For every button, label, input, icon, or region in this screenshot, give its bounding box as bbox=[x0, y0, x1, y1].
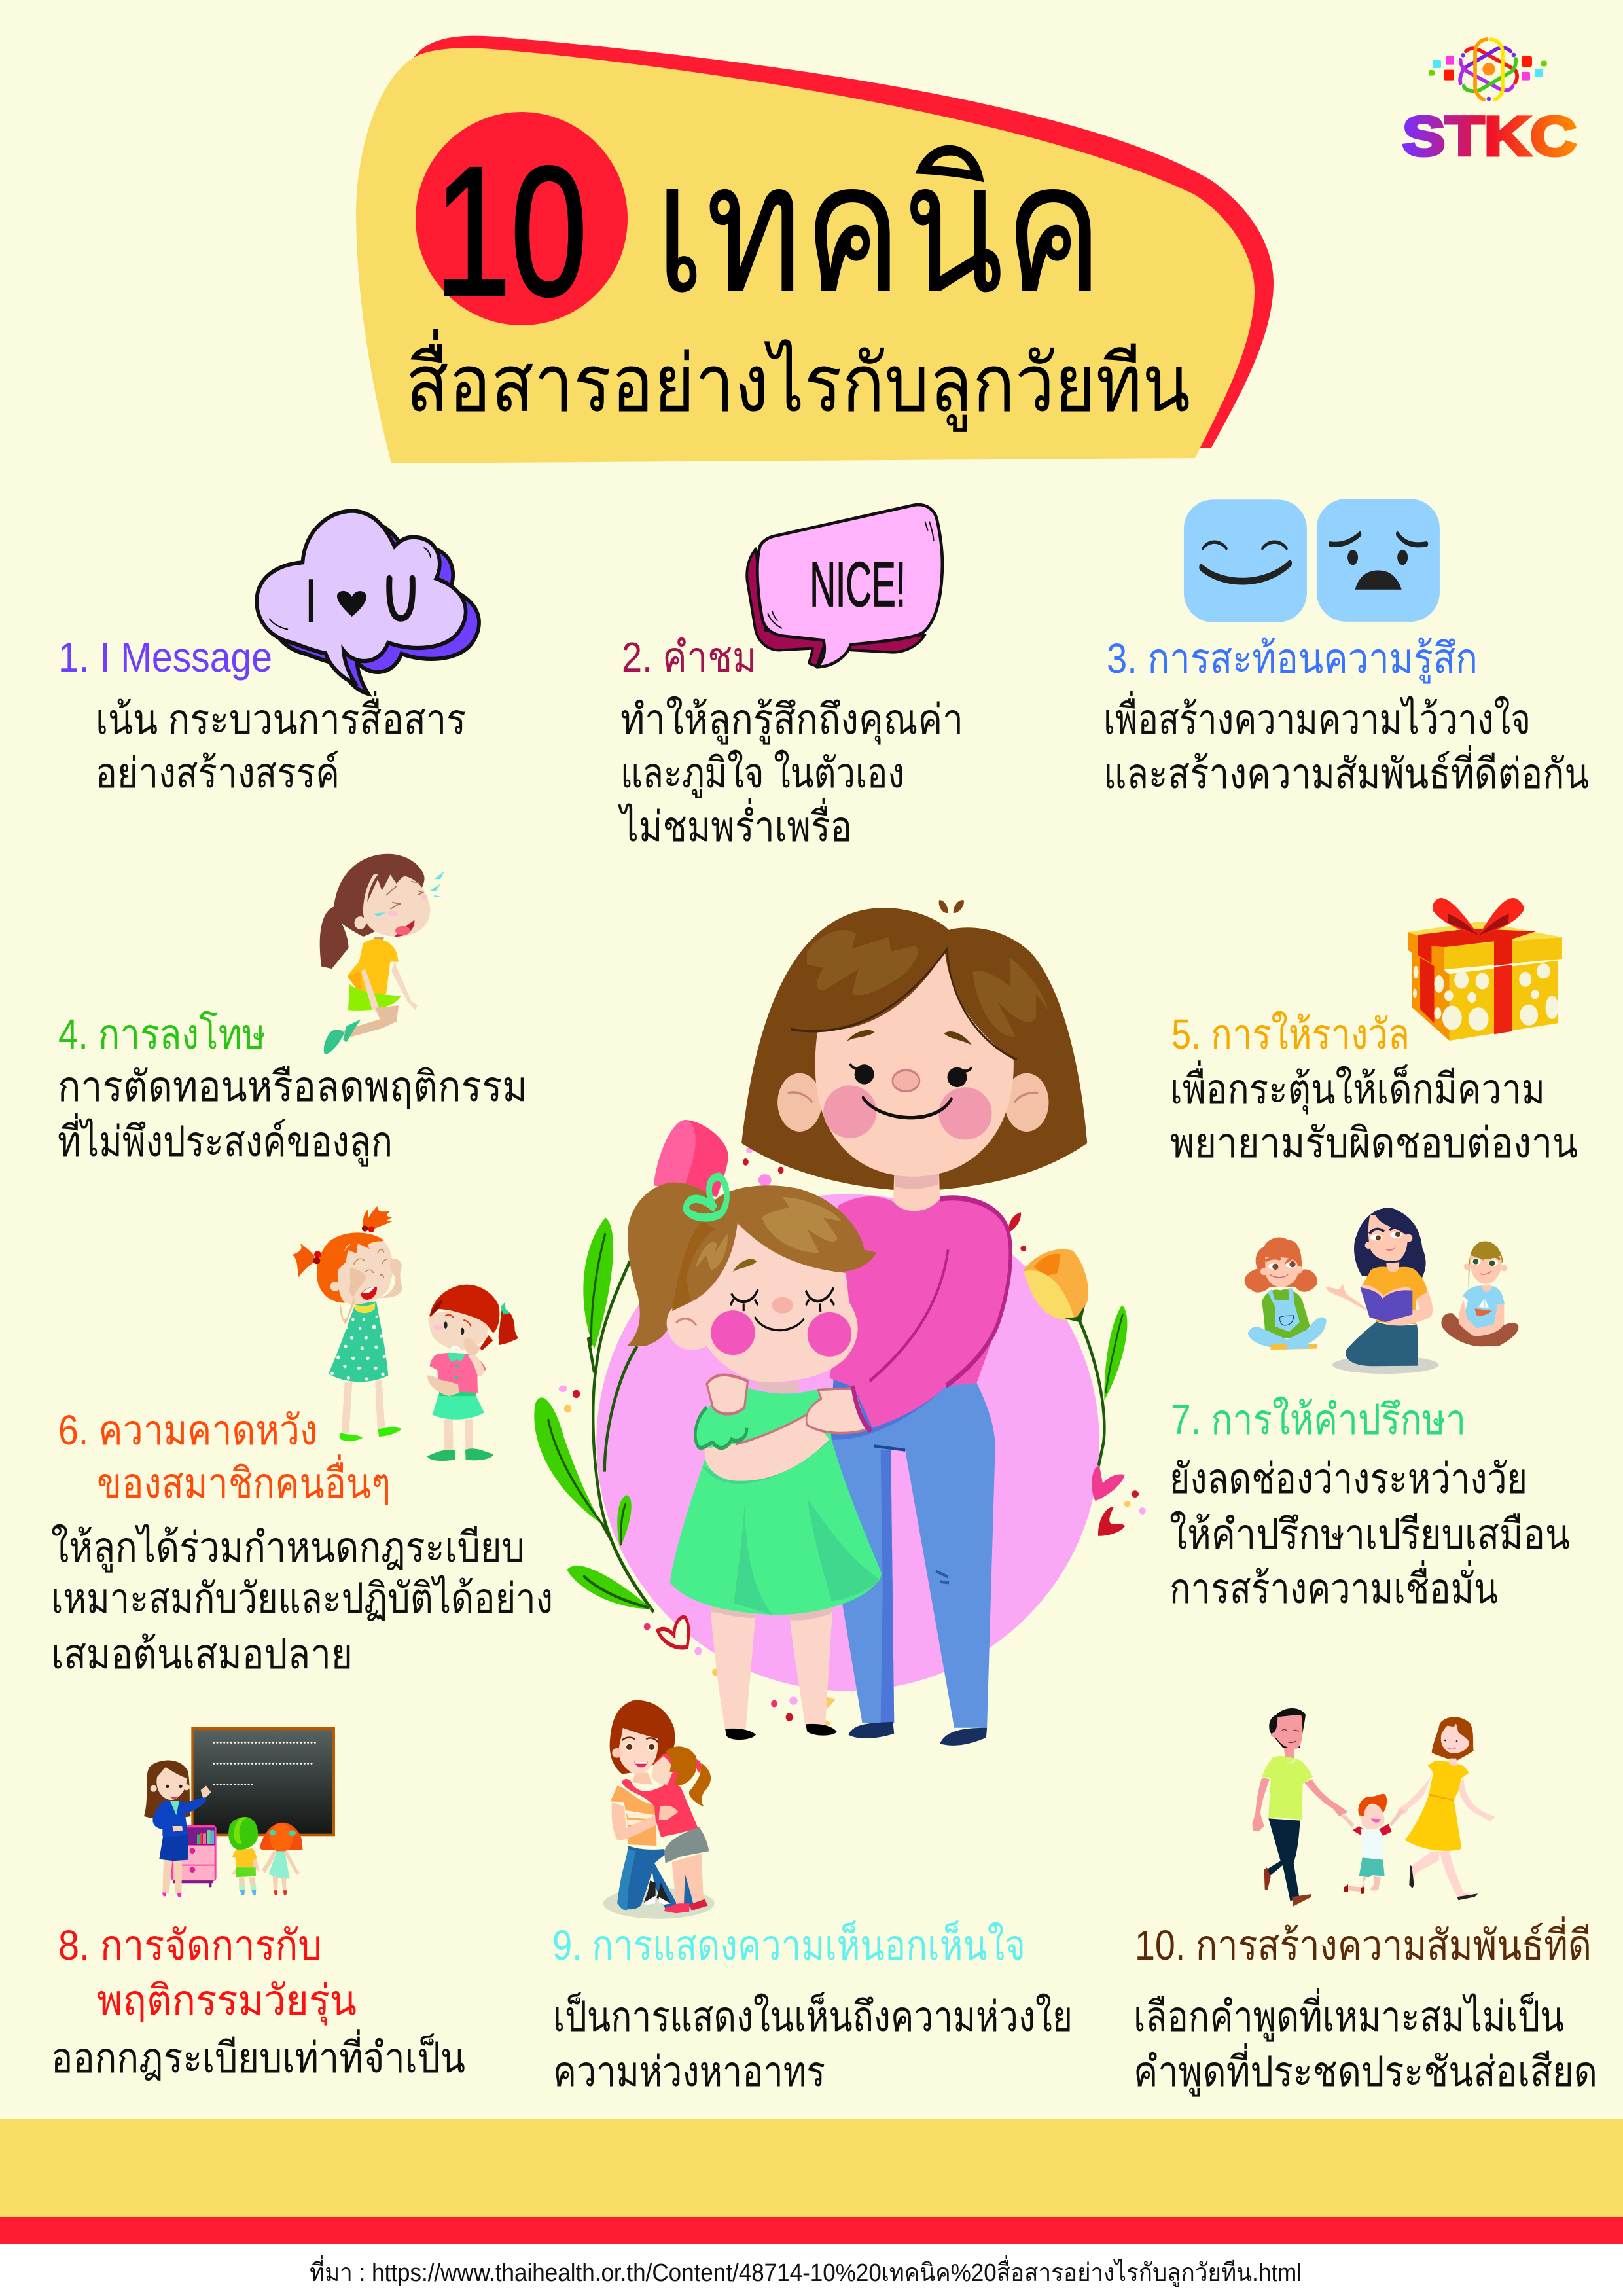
section 3 body: เพื่อสร้างความความไว้วางใจ bbox=[1103, 691, 1531, 743]
decorative leaves and stems left bbox=[534, 1217, 654, 1612]
section 2 body: และภูมิใจ ในตัวเอง bbox=[620, 749, 904, 798]
section 2 icon: NICE speech bubble: NICE! bbox=[810, 550, 906, 620]
daughter: legs and shoes bbox=[710, 1604, 837, 1740]
section 6 heading: ของสมาชิกคนอื่นๆ bbox=[97, 1454, 391, 1507]
decorative hearts and dots bbox=[559, 1147, 1146, 1728]
section 10 icon: walking family bbox=[1252, 1708, 1495, 1907]
section 4 icon: crying girl bbox=[320, 854, 444, 1054]
section 1 body: อย่างสร้างสรรค์ bbox=[96, 749, 340, 797]
mother: jeans and shoes bbox=[830, 1378, 995, 1746]
section 7 body: ให้คำปรึกษาเปรียบเสมือน bbox=[1169, 1511, 1570, 1558]
section 3 icon: emoji faces bbox=[1184, 499, 1440, 622]
section 2 heading: 2. คำชม bbox=[622, 634, 757, 681]
footer white background bbox=[0, 2244, 1623, 2296]
section 9 body bbox=[553, 1992, 1073, 2095]
pink background circle bbox=[596, 1194, 1099, 1691]
section 6 icon: two upset girls bbox=[293, 1206, 518, 1461]
section 1 icon: I love U cloud bbox=[257, 511, 479, 694]
section 4 body bbox=[58, 1063, 527, 1167]
section 9 body: เป็นการแสดงในเห็นถึงความห่วงใย bbox=[553, 1992, 1073, 2040]
section 8 heading: พฤติกรรมวัยรุ่น bbox=[97, 1977, 357, 2026]
mother: ears, face and features bbox=[777, 900, 1048, 1211]
section 10 body bbox=[1133, 1988, 1597, 2097]
section 5 body bbox=[1170, 1060, 1578, 1166]
section 4 heading: 4. การลงโทษ bbox=[58, 1011, 266, 1058]
section 7 body bbox=[1169, 1455, 1570, 1612]
section 6 body: ให้ลูกได้ร่วมกำหนดกฎระเบียบ bbox=[51, 1524, 525, 1573]
section 9 heading: 9. การแสดงความเห็นอกเห็นใจ bbox=[552, 1921, 1026, 1969]
section 7 icon: teacher reading with two children bbox=[1245, 1208, 1518, 1374]
mother: hair back bbox=[741, 908, 1087, 1190]
section 2 body: ไม่ชมพร่ำเพรื่อ bbox=[618, 798, 852, 850]
hugging arms and hands bbox=[695, 1375, 870, 1481]
section 1 icon: I love U cloud: I bbox=[307, 567, 315, 636]
logo: STKC: STKC bbox=[1402, 105, 1577, 167]
section 6 heading: 6. ความคาดหวัง bbox=[58, 1407, 317, 1454]
section 2 body: ทำให้ลูกรู้สึกถึงคุณค่า bbox=[620, 696, 963, 745]
flower behind daughter's head bbox=[654, 1120, 728, 1197]
section 8 heading: 8. การจัดการกับ bbox=[58, 1922, 322, 1969]
section 5 body: เพื่อกระตุ้นให้เด็กมีความ bbox=[1170, 1060, 1545, 1115]
section 2 body bbox=[618, 696, 963, 850]
section 7 body: การสร้างความเชื่อมั่น bbox=[1169, 1560, 1498, 1612]
section 5 icon: gift box bbox=[1408, 898, 1562, 1041]
number badge: 10: 10 bbox=[435, 130, 587, 334]
section 2 icon: NICE speech bubble bbox=[747, 505, 942, 667]
footer yellow band bbox=[0, 2119, 1623, 2217]
section 8 icon: teacher at blackboard bbox=[144, 1727, 335, 1897]
subtitle: สื่อสารอย่างไรกับลูกวัยทีน bbox=[406, 329, 1190, 432]
section 8 heading bbox=[58, 1922, 357, 2026]
section 4 body: การตัดทอนหรือลดพฤติกรรม bbox=[58, 1063, 527, 1110]
section 3 body bbox=[1103, 691, 1589, 797]
daughter: head bbox=[627, 1177, 876, 1393]
section 6 heading bbox=[58, 1407, 391, 1507]
main illustration: mother hugging daughter bbox=[534, 900, 1146, 1746]
section 7 heading: 7. การให้คำปรึกษา bbox=[1171, 1396, 1466, 1443]
section 9 icon: mother kissed by daughter bbox=[603, 1700, 715, 1919]
section 8 body: ออกกฎระเบียบเท่าที่จำเป็น bbox=[51, 2029, 465, 2081]
section 1 heading: 1. I Message bbox=[58, 634, 272, 681]
logo: STKC bbox=[1402, 39, 1577, 167]
footer red band bbox=[0, 2217, 1623, 2244]
section 7 body: ยังลดช่องว่างระหว่างวัย bbox=[1169, 1455, 1527, 1502]
section 9 body: ความห่วงหาอาทร bbox=[553, 2048, 825, 2095]
section 1 body bbox=[96, 691, 466, 797]
section 3 heading: 3. การสะท้อนความรู้สึก bbox=[1107, 635, 1478, 684]
section 6 body: เสมอต้นเสมอปลาย bbox=[51, 1630, 353, 1677]
section 6 body bbox=[51, 1524, 553, 1677]
mother: pink sweater bbox=[830, 1196, 1010, 1428]
title banner bbox=[356, 36, 1274, 463]
heading: เทคนิค: เทคนิค bbox=[654, 126, 1103, 330]
section 6 body: เหมาะสมกับวัยและปฏิบัติได้อย่าง bbox=[51, 1575, 553, 1622]
section 5 heading: 5. การให้รางวัล bbox=[1171, 1011, 1410, 1058]
section 1 body: เน้น กระบวนการสื่อสาร bbox=[96, 691, 466, 743]
section 5 body: พยายามรับผิดชอบต่องาน bbox=[1170, 1119, 1578, 1166]
daughter: green dress bbox=[670, 1387, 882, 1615]
section 4 body: ที่ไม่พึงประสงค์ของลูก bbox=[58, 1113, 393, 1167]
source citation: ที่มา : https://www.thaihealth.or.th/Content/48714-10%20เทคนิค%20สื่อสารอย่างไรกับลูกวัยทีน.html bbox=[310, 2255, 1302, 2287]
decorative flower right bbox=[1007, 1212, 1127, 1536]
